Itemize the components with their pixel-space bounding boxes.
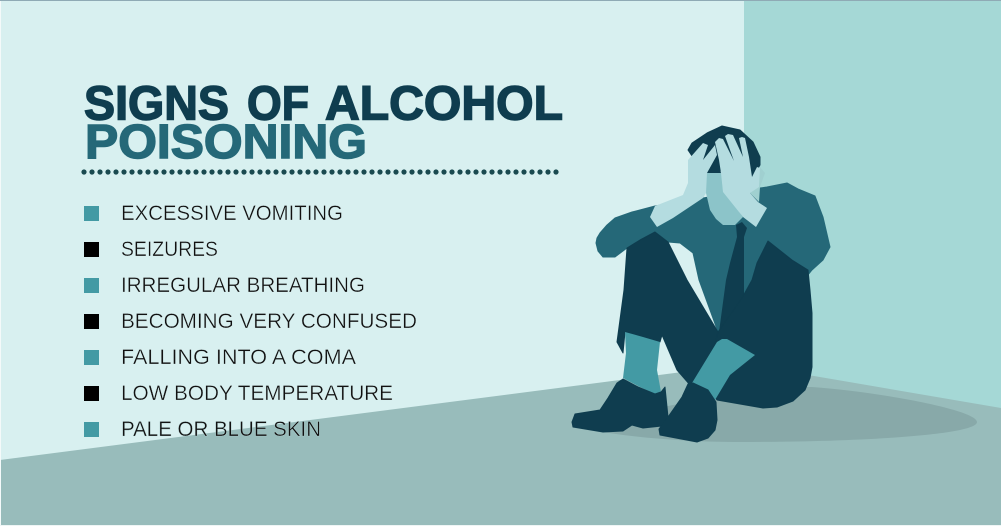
sign: becoming very confused: BECOMING VERY CONFUSED [121, 310, 417, 333]
trousers: body [705, 241, 812, 408]
title [84, 76, 563, 169]
title line 1 [84, 76, 563, 130]
panel: side wall [744, 0, 1001, 526]
sign: irregular breathing: IRREGULAR BREATHING [121, 274, 365, 297]
list of signs [84, 202, 417, 441]
sign: seizures [84, 238, 218, 261]
ear and neck [750, 167, 765, 202]
illustration: distressed man [572, 126, 830, 442]
title line 2: POISONING [85, 115, 367, 169]
left shoe [572, 379, 668, 432]
floor shadow [577, 387, 977, 442]
frame edge: top [0, 0, 1001, 1]
panel: floor [0, 364, 1001, 526]
dotted divider [84, 169, 557, 175]
left sock [623, 332, 661, 394]
face [706, 173, 743, 225]
right hand and wrist [715, 134, 767, 227]
left hand and forearm [650, 143, 717, 227]
title line 1: OF [247, 76, 309, 130]
right shoe [659, 383, 717, 442]
trousers: left leg [617, 232, 722, 385]
frame edge: left [0, 1, 1, 526]
sign: low body temperature: LOW BODY TEMPERATURE [121, 382, 393, 405]
sign: falling into a coma: FALLING INTO A COMA [121, 346, 356, 369]
hair [688, 126, 760, 178]
tie [719, 222, 747, 332]
shadow between hands [707, 155, 721, 173]
right sock [692, 339, 755, 400]
jacket [596, 183, 830, 332]
sign: pale or blue skin: PALE OR BLUE SKIN [121, 418, 321, 441]
title line 1: ALCOHOL [325, 76, 563, 130]
sign: excessive vomiting: EXCESSIVE VOMITING [121, 202, 343, 225]
sign: seizures: SEIZURES [121, 238, 218, 261]
title line 1: SIGNS [84, 76, 229, 130]
frame edge: bottom [0, 525, 1001, 526]
